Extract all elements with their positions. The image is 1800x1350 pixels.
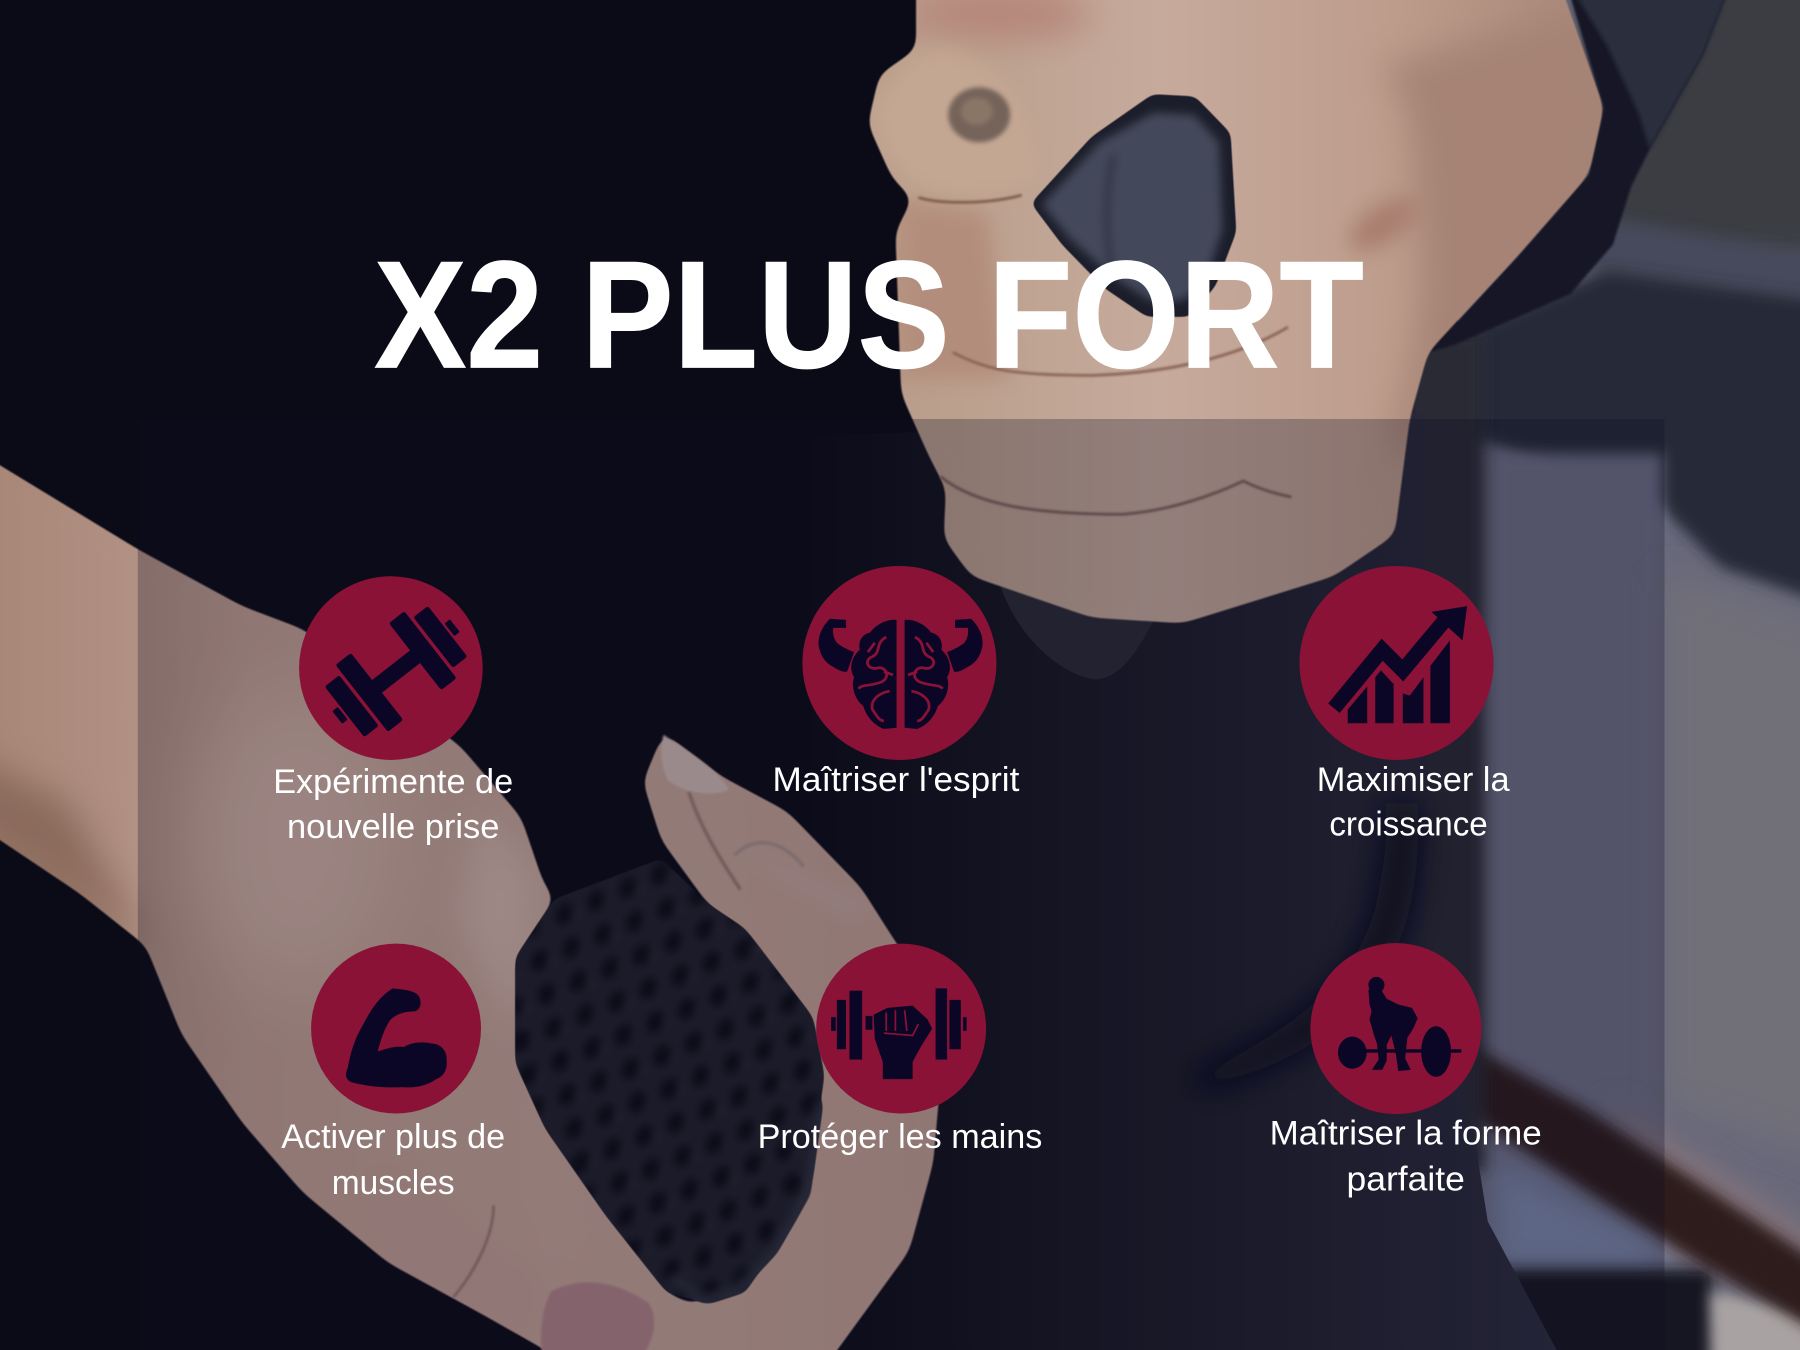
item: Maîtriser la forme parfaite: [1270, 943, 1542, 1198]
shirt: [804, 413, 1557, 1350]
lower grip tail: [996, 574, 1154, 680]
label: Maîtriser la forme: [1270, 1115, 1542, 1153]
red circle: [1310, 943, 1481, 1114]
blurred street background: [1406, 0, 1800, 1350]
sleeve lighter band: [1565, 0, 1733, 149]
label: Maîtriser l'esprit: [773, 761, 1020, 799]
finger nail: [948, 87, 1010, 142]
brain folds: [859, 637, 942, 721]
red circle: [299, 576, 483, 760]
item: Maîtriser l'esprit: [773, 566, 1020, 799]
shirt fold: [1194, 804, 1419, 1091]
item: Maximiser la croissance: [1299, 566, 1510, 844]
label line 2: parfaite: [1347, 1160, 1465, 1198]
right lobe: [905, 620, 950, 729]
right biceps: [947, 619, 983, 672]
finger creases lower hand: [453, 792, 804, 1297]
left lobe: [851, 620, 897, 729]
red circle: [816, 944, 986, 1114]
label line 2: croissance: [1329, 806, 1488, 844]
icon: brain with biceps: [818, 619, 983, 729]
fist hand: [868, 0, 1607, 623]
left biceps: [818, 619, 854, 672]
item: Expérimente de nouvelle prise: [273, 576, 513, 846]
item: Protéger les mains: [758, 944, 1042, 1156]
item: Activer plus de muscles: [281, 944, 505, 1202]
label: Activer plus de: [281, 1118, 505, 1156]
studded grip device: [515, 859, 824, 1304]
red circle: [1299, 566, 1493, 760]
icon: growth chart: [1334, 606, 1467, 723]
fingertip nail: [661, 735, 729, 794]
icon: fist with dumbbell: [831, 988, 967, 1079]
dark photo overlay: [138, 419, 1665, 1350]
icon: deadlift: [1338, 977, 1461, 1077]
title: X2 PLUS FORT: [374, 230, 1364, 400]
icon: flexed arm: [346, 988, 447, 1087]
label: Expérimente de: [273, 763, 513, 801]
label: Maximiser la: [1317, 761, 1510, 799]
finger creases: [918, 195, 1291, 514]
label line 2: muscles: [332, 1164, 455, 1202]
sleeve: [1428, 0, 1733, 352]
icon: dumbbell: [311, 592, 481, 751]
upper grip device: [1031, 94, 1236, 317]
label: Protéger les mains: [758, 1118, 1042, 1156]
thumb nail: [541, 1282, 654, 1350]
red circle: [802, 566, 996, 760]
red circle: [311, 944, 481, 1114]
finger nail centre: [961, 98, 993, 125]
label line 2: nouvelle prise: [287, 808, 499, 846]
lower left hand: [0, 437, 946, 1350]
